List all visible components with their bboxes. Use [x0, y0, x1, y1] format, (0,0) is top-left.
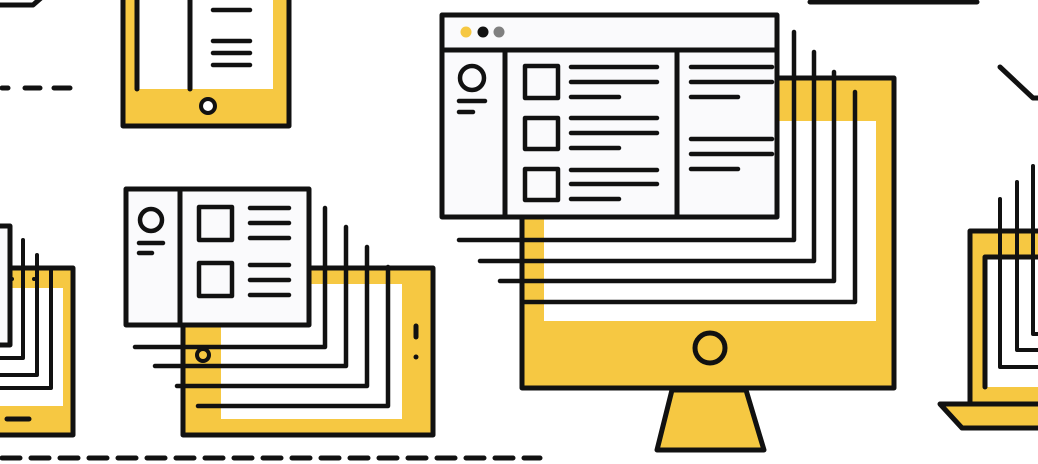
dashed line: top-left: [2, 86, 70, 90]
connector lines: tablet: [135, 208, 388, 406]
window: browser: [442, 15, 777, 217]
icon: top tablet: [123, 0, 289, 126]
window: tablet app: [126, 189, 309, 325]
connector lines: monitor: [459, 32, 855, 302]
dashed line: bottom: [2, 456, 540, 460]
icon: left laptop: [0, 226, 73, 435]
line: top-right: [810, 0, 977, 4]
icon: right laptop: [940, 166, 1038, 428]
line: right diagonal: [1000, 67, 1038, 98]
icon: desktop monitor: [442, 15, 894, 450]
icon: middle tablet: [126, 189, 433, 435]
icon: top-left fragment: [0, 0, 41, 5]
